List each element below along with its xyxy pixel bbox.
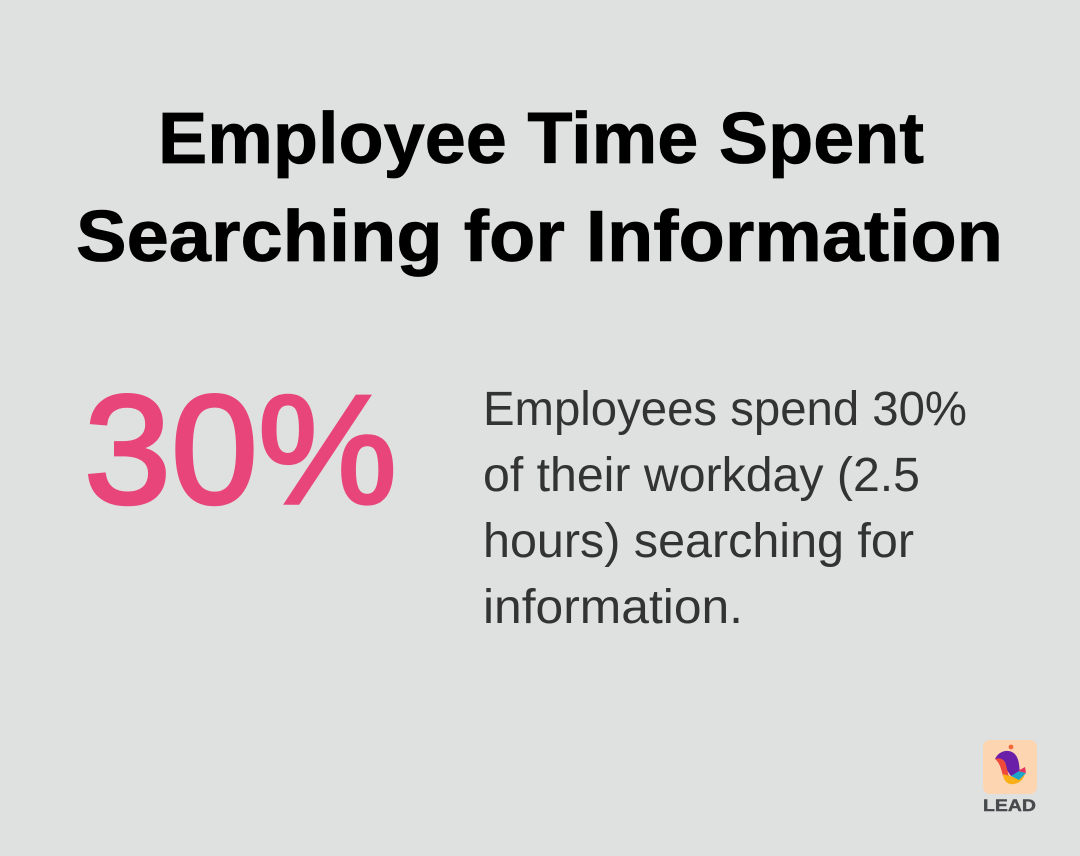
description text	[483, 383, 967, 634]
big statistic: 30%: 30%	[84, 363, 397, 536]
logo: LEAD	[983, 740, 1037, 815]
description text: of their workday (2.5	[483, 449, 920, 502]
title: Searching for Information	[76, 197, 1003, 277]
icon: logo bird	[995, 745, 1026, 784]
icon: logo tile	[983, 740, 1037, 794]
logo wordmark: LEAD	[983, 797, 1036, 815]
title: Employee Time Spent	[158, 99, 924, 179]
title	[76, 99, 1003, 277]
description text: Employees spend 30%	[483, 383, 967, 436]
description text: hours) searching for	[483, 515, 914, 568]
description text: information.	[483, 581, 743, 634]
